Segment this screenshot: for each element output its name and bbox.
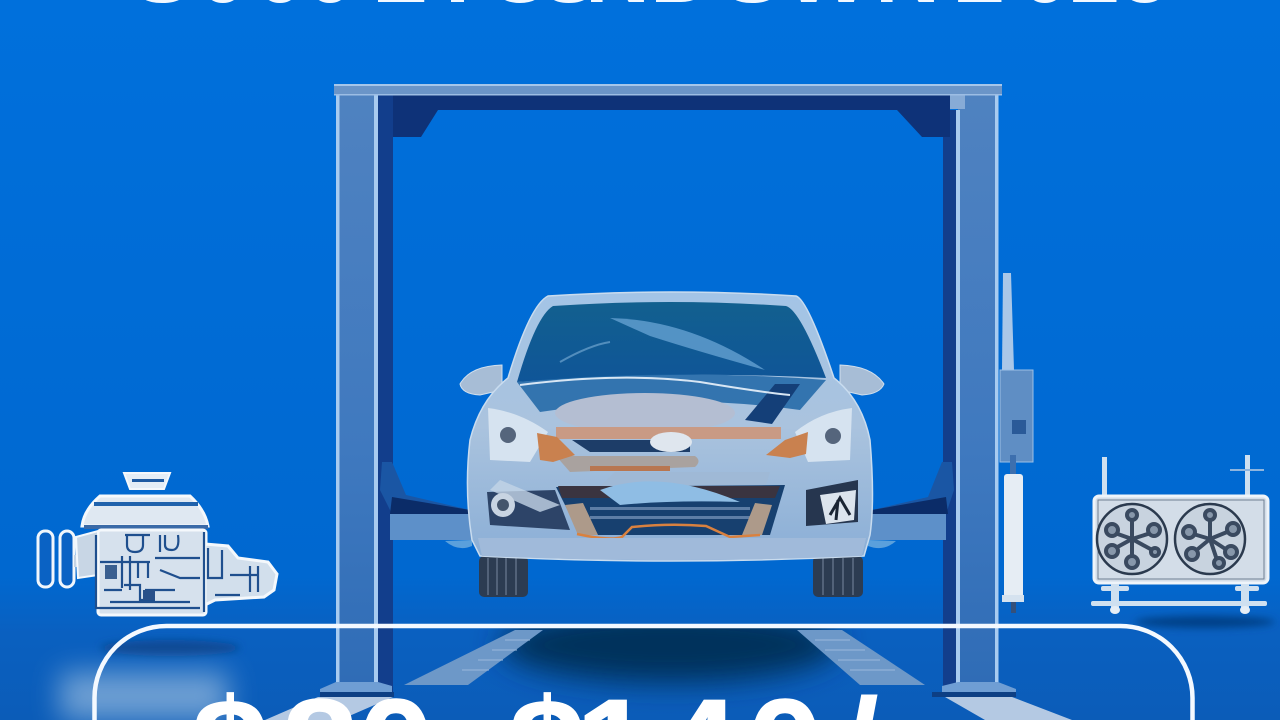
price panel outline [94,626,1192,720]
engine bay band [556,427,781,505]
icon: radiator with twin fans [1091,455,1268,614]
lift: right column [932,95,1016,697]
floor shadow [100,607,1275,683]
lower intake and fog lamps [487,480,858,535]
hood [517,374,826,433]
body shell [467,292,872,561]
headlights [488,408,852,462]
fan left [1097,504,1167,574]
bumper [478,538,866,560]
wheels [479,556,863,597]
copper trim line [577,525,760,538]
lift: top beam [334,84,1002,137]
fan right [1175,504,1245,574]
lift: left column [320,95,394,697]
lift arms [380,462,954,548]
mirrors [460,365,884,395]
floor ramps [265,630,1072,720]
icon: engine [38,473,277,615]
windshield [517,302,826,382]
hydraulic power unit [1000,273,1033,613]
blurred light patch in price panel [60,672,228,720]
car [460,292,884,597]
